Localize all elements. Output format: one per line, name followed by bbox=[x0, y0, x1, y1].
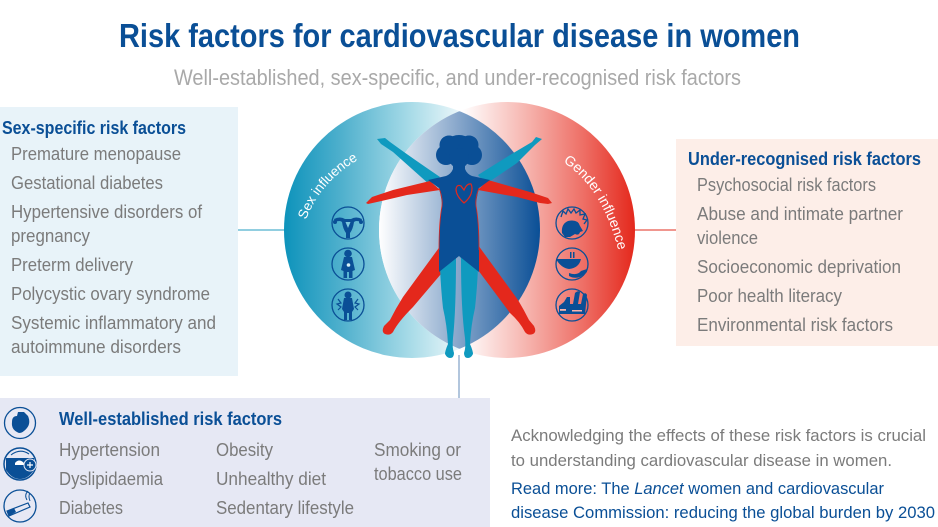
subtitle: Well-established, sex-specific, and under-recognised risk factors bbox=[174, 65, 741, 90]
connector lines bbox=[238, 230, 676, 398]
panel: under-recognised risk factors bbox=[676, 139, 938, 346]
list: well-established column 3 bbox=[374, 440, 462, 484]
panel: well-established risk factors bbox=[0, 398, 490, 527]
text block: read more bbox=[511, 479, 935, 522]
list: well-established column 1 bbox=[59, 440, 164, 518]
venn diagram bbox=[284, 102, 635, 358]
list: well-established column 1: Hypertension bbox=[59, 440, 160, 460]
list: under-recognised factors: Psychosocial risk factors bbox=[697, 175, 876, 195]
list: under-recognised factors: Socioeconomic deprivation bbox=[697, 257, 901, 277]
icon: heart bbox=[4, 408, 36, 438]
list: sex-specific factors: Gestational diabetes bbox=[11, 173, 163, 193]
list: under-recognised factors: Abuse and intimate partner bbox=[697, 204, 903, 224]
list: under-recognised factors bbox=[697, 175, 903, 335]
text block: conclusion bbox=[511, 426, 926, 470]
list: under-recognised factors: Environmental risk factors bbox=[697, 315, 893, 335]
list: well-established column 2 bbox=[216, 440, 354, 518]
icon: hands with bowl bbox=[556, 248, 588, 280]
label: gender influence: Gender influence bbox=[565, 156, 625, 250]
icon: head with burst bbox=[556, 207, 588, 239]
icon: medicine kit bbox=[4, 448, 36, 480]
list: sex-specific factors: Preterm delivery bbox=[11, 255, 133, 275]
list: well-established column 3: tobacco use bbox=[374, 464, 462, 484]
list: sex-specific factors: autoimmune disorders bbox=[11, 337, 181, 357]
panel: sex-specific risk factors bbox=[0, 107, 238, 376]
list: well-established column 1: Dyslipidaemia bbox=[59, 469, 164, 489]
text block: read more: Read more: The Lancet women and cardiovascular bbox=[511, 479, 884, 498]
list: under-recognised factors: violence bbox=[697, 228, 758, 248]
list: sex-specific factors: pregnancy bbox=[11, 226, 90, 246]
title: Risk factors for cardiovascular disease in women bbox=[119, 17, 800, 54]
icon: cigarette bbox=[4, 490, 36, 522]
figure: woman with four arms and legs bbox=[366, 135, 552, 358]
circle: gender influence bbox=[379, 102, 635, 358]
list: sex-specific factors: Hypertensive disorders of bbox=[11, 202, 203, 222]
cyan raised arms bbox=[377, 137, 542, 185]
icon: inflamed figure bbox=[332, 289, 364, 321]
circle: sex influence bbox=[284, 102, 540, 358]
list: well-established column 3: Smoking or bbox=[374, 440, 461, 460]
icon: uterus bbox=[332, 207, 364, 239]
list: sex-specific factors bbox=[11, 144, 216, 357]
text block: conclusion: to understanding cardiovascular disease in women. bbox=[511, 451, 892, 470]
list: sex-specific factors: Systemic inflammatory and bbox=[11, 313, 216, 333]
list: well-established column 2: Obesity bbox=[216, 440, 273, 460]
list: well-established column 1: Diabetes bbox=[59, 498, 123, 518]
heading: well-established: Well-established risk factors bbox=[59, 409, 282, 429]
heart outline bbox=[456, 184, 472, 203]
text block: read more: disease Commission: reducing the global burden by 2030 bbox=[511, 503, 935, 522]
list: sex-specific factors: Polycystic ovary syndrome bbox=[11, 284, 210, 304]
label: sex influence: Sex influence bbox=[298, 155, 356, 218]
heading: sex-specific: Sex-specific risk factors bbox=[2, 118, 186, 138]
waist outline bbox=[439, 188, 479, 250]
heading: under-recognised: Under-recognised risk factors bbox=[688, 149, 921, 169]
overlap lens bbox=[379, 111, 540, 349]
list: under-recognised factors: Poor health literacy bbox=[697, 286, 842, 306]
text block: conclusion: Acknowledging the effects of these risk factors is crucial bbox=[511, 426, 926, 445]
icon: factory bbox=[556, 289, 588, 321]
list: well-established column 2: Unhealthy diet bbox=[216, 469, 326, 489]
red lowered arms bbox=[366, 180, 552, 204]
icon: pregnant figure bbox=[332, 248, 364, 280]
torso and head bbox=[428, 135, 490, 272]
list: well-established column 2: Sedentary lifestyle bbox=[216, 498, 354, 518]
list: sex-specific factors: Premature menopause bbox=[11, 144, 181, 164]
red legs bbox=[383, 245, 535, 335]
cyan legs bbox=[440, 256, 478, 358]
